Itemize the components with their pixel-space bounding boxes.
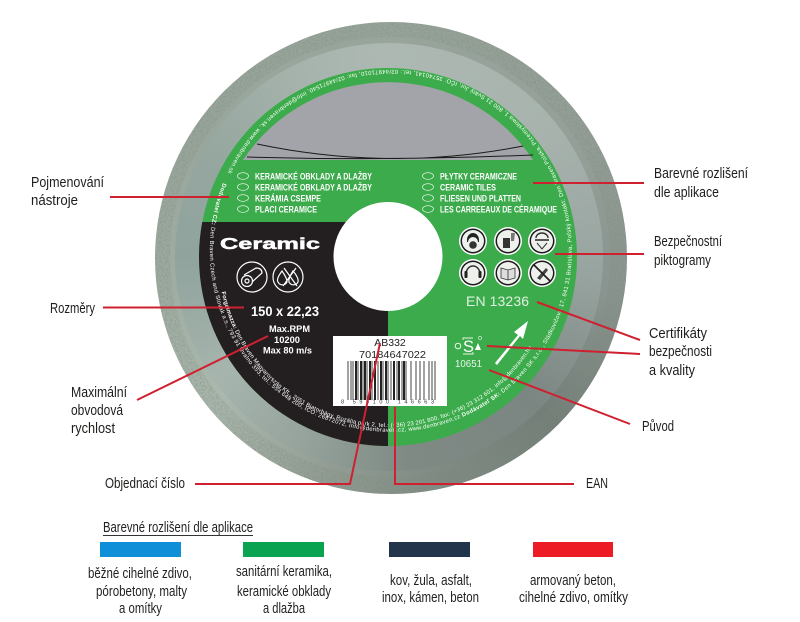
label: dimensions: Rozměry [50,300,95,317]
arrow: rotation direction [495,321,528,365]
label: max speed: rychlost [71,420,116,437]
red leader lines [103,183,644,484]
label: certificates: a kvality [649,362,695,379]
legend: red: cihelné zdivo, omítky [519,589,628,606]
product names, right column: LES CARREEAUX DE CÉRAMIQUE [440,204,557,214]
label: max speed: obvodová [71,402,124,419]
label: origin: Původ [642,418,674,435]
legend: blue: a omítky [119,600,162,617]
safety pictograms [459,227,556,287]
barcode label: AB332 [374,337,406,349]
barcode thick bars [356,361,404,400]
label: certificates: Certifikáty [649,325,707,342]
barcode bars [348,361,435,400]
legend: navy: kov, žula, asfalt, [390,572,472,589]
product names, right column: CERAMIC TILES [440,182,496,192]
product names, left column: KERAMICKÉ OBKLADY A DLAŽBY [255,182,372,192]
product names, left column: KERAMICKÉ OBKLADY A DLAŽBY [255,170,372,182]
label: safety pictograms: Bezpečnostní [654,233,723,250]
label: colour coding: Barevné rozlišení [654,165,749,182]
pictogram: respirator [459,227,487,255]
diamond rim [155,22,627,494]
centre hole [334,202,442,311]
certificate number: 10651 [455,359,482,370]
barcode label [333,336,447,406]
product names, right column [422,172,557,214]
legend: navy [382,542,479,606]
legend heading: Barevné rozlišení dle aplikace [103,519,253,536]
legend: red [519,542,628,606]
legend: green: a dlažba [263,600,305,617]
standard: EN 13236 [466,293,529,309]
blade disc [155,22,627,494]
steel body [175,43,603,471]
dimensions: 150 x 22,23 [251,303,319,319]
barcode digits: 8 595100 146663 [341,400,434,406]
grey segment [243,82,533,160]
label: order number: Objednací číslo [105,475,185,492]
label: safety pictograms [654,233,723,269]
speed data: 10200 [274,335,300,346]
black curves in segment [247,144,533,159]
legend: green: keramické obklady [237,583,331,600]
label: tool name [31,174,105,209]
ring text outer: Dodavatel CZ: Den Braven Czech and Slovak a.s., 793 91 Úvalno 353, tel.: 554 648 200, IČO: 26872072, info@denbraven.cz, www.denbraven.cz Dodávateľ SK: Den Braven SK s.r.o., Sládkovičova 17, 841 31 Bratislava, Poľský kontakt: Den Braven Polska, Przemysłowa 1, 800 21 Svätý Jur, IČO: 35740141, tel.: 02/44971010, fax: 02/44971540, info@denbraven.sk, www.denbraven.sk [210,70,572,432]
pictogram: ear protection [459,259,487,287]
icon: water drops crossed [273,262,303,292]
pictogram: goggles [528,227,556,255]
green label [199,68,577,446]
ring text inner: Forgalmazza: Den Braven Magyarország Kft., 2051 Biatorbágy, Rozália park 2, tel.: (+36) 23 201 800, fax: (+36) 23 312 601, info@denbraven.hu [222,292,532,428]
legend: blue [88,542,192,617]
product title: Ceramic [220,236,320,253]
label: EAN: EAN [586,475,608,492]
label: max speed: Maximální [71,384,128,401]
legend: blue: běžné cihelné zdivo, [88,565,192,582]
product names, left column [238,170,372,214]
black label sector [199,222,388,446]
rim texture [155,22,627,494]
legend: red: armovaný beton, [530,572,616,589]
speed data [263,324,312,356]
product names, right column: PŁYTKY CERAMICZNE [440,172,517,182]
product names, left column: PLACI CERAMICE [255,204,317,214]
label: max speed [71,384,128,437]
barcode label: 70184647022 [359,349,426,361]
label: tool name: nástroje [31,192,78,209]
legend: green: sanitární keramika, [236,563,332,580]
label: certificates [649,325,712,379]
certification mark: S [463,337,474,356]
legend: green [236,542,332,617]
legend: navy: inox, kámen, beton [382,589,479,606]
product names, right column: FLIESEN UND PLATTEN [440,194,521,204]
certification mark [455,336,482,356]
speed data: Max.RPM [269,324,310,335]
product names, left column: KERÁMIA CSEMPE [255,194,321,204]
label: colour coding [654,165,749,201]
speed data: Max 80 m/s [263,346,312,356]
pictogram: coverall [494,227,522,255]
label: safety pictograms: piktogramy [654,252,711,269]
icon: angle grinder [237,262,267,292]
label: colour coding: dle aplikace [654,184,719,201]
pictogram: manual [494,259,522,287]
legend: blue: pórobetony, malty [96,583,187,600]
label: tool name: Pojmenování [31,174,105,191]
pictogram: prohibited [528,259,556,287]
label: certificates: bezpečnosti [649,343,712,360]
